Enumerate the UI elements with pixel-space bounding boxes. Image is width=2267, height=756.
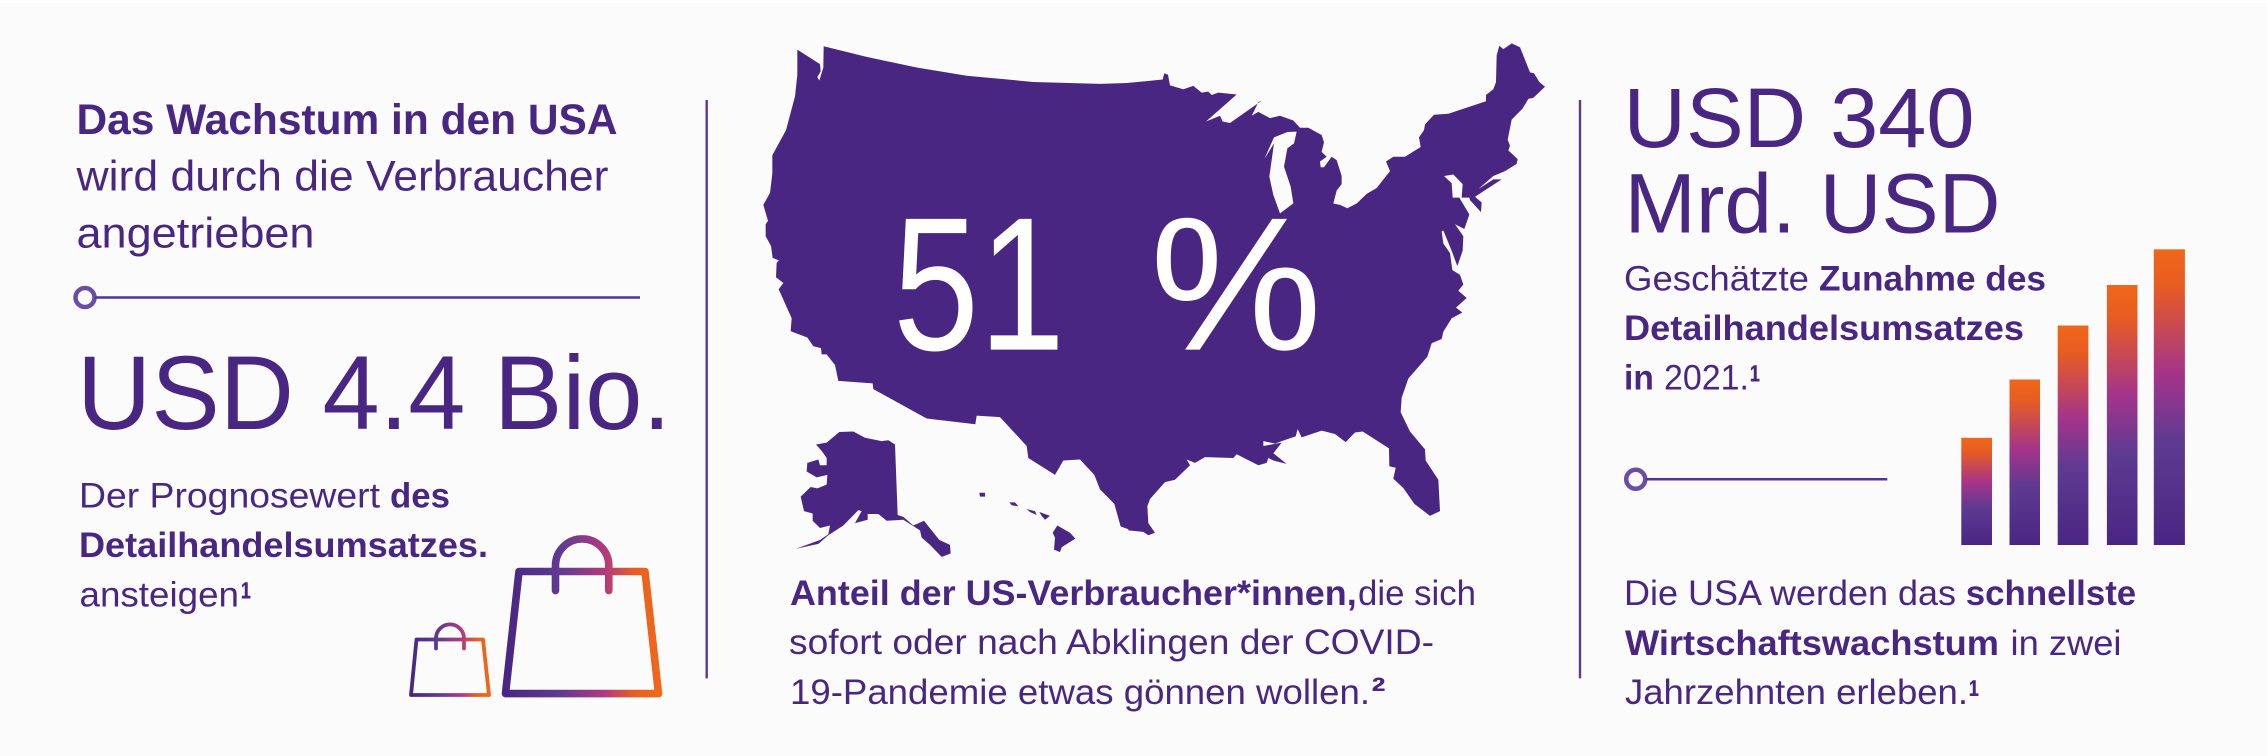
text block: share of US consumers: Anteil der US-Verbraucher*innen, <box>790 574 1357 613</box>
text block: estimated retail sales increase <box>1624 260 2046 407</box>
panel: left consumer growth <box>75 96 671 695</box>
panel: centre map <box>763 43 1545 713</box>
big number: USD 340 Mrd. USD: Mrd. USD <box>1624 156 2000 250</box>
divider right <box>1579 100 1581 678</box>
text block: estimated retail sales increase: Detailhandelsumsatzes <box>1624 309 2024 348</box>
text block: forecast value of retail sales: Detailhandelsumsatzes. <box>79 526 488 565</box>
text block: forecast value of retail sales: ansteigen <box>80 576 239 615</box>
text block: fastest economic growth: Jahrzehnten erleben. <box>1625 673 1968 712</box>
icon: large shopping bag <box>506 539 658 694</box>
text block: share of US consumers: 19-Pandemie etwas gönnen wollen. <box>790 673 1370 712</box>
text block: forecast value of retail sales: Der Prognosewert <box>79 477 380 516</box>
text block: fastest economic growth: ¹ <box>1968 672 1980 721</box>
text block: share of US consumers: ² <box>1372 671 1386 713</box>
map of the United States <box>763 43 1545 557</box>
text block: share of US consumers: die sich <box>1358 574 1476 613</box>
text block: forecast value of retail sales <box>79 477 488 624</box>
text block: forecast value of retail sales: ¹ <box>240 572 252 624</box>
text block: fastest economic growth: Die USA werden das <box>1624 574 1956 613</box>
text block: estimated retail sales increase: 2021. <box>1664 359 1749 398</box>
text block: fastest economic growth: Wirtschaftswachstum <box>1625 624 1999 663</box>
text block: forecast value of retail sales: des <box>390 477 450 516</box>
panel: right retail increase <box>1624 71 2185 721</box>
connector line with circle <box>1626 470 1887 489</box>
icon: small shopping bag <box>411 624 489 695</box>
big number: USD 4.4 Bio.: USD 4.4 Bio. <box>77 335 671 452</box>
big number: USD 340 Mrd. USD: USD 340 <box>1624 71 1974 165</box>
divider left <box>706 100 708 678</box>
big number: 51 %: % <box>1150 179 1322 391</box>
text block: estimated retail sales increase: Geschätzte <box>1624 260 1809 299</box>
connector line with circle <box>76 288 640 307</box>
text block: fastest economic growth <box>1624 574 2136 721</box>
text block: estimated retail sales increase: Zunahme des <box>1819 260 2046 299</box>
heading: growth driven by consumers: angetrieben <box>76 209 314 257</box>
text block: estimated retail sales increase: in <box>1624 359 1654 398</box>
text block: fastest economic growth: schnellste <box>1966 574 2136 613</box>
big number: 51 % <box>893 179 1322 391</box>
text block: share of US consumers <box>789 574 1476 713</box>
text block: fastest economic growth: in zwei <box>2010 624 2122 663</box>
text block: share of US consumers: sofort oder nach Abklingen der COVID- <box>789 623 1434 662</box>
bar chart: rising gradient bars <box>1961 249 2185 545</box>
big number: 51 %: 51 <box>893 179 1065 391</box>
heading: growth driven by consumers <box>75 96 617 257</box>
heading: growth driven by consumers: Das Wachstum in den USA <box>76 96 618 144</box>
text block: estimated retail sales increase: ¹ <box>1750 355 1760 407</box>
heading: growth driven by consumers: wird durch die Verbraucher <box>75 152 608 200</box>
big number: USD 340 Mrd. USD <box>1624 71 2000 250</box>
